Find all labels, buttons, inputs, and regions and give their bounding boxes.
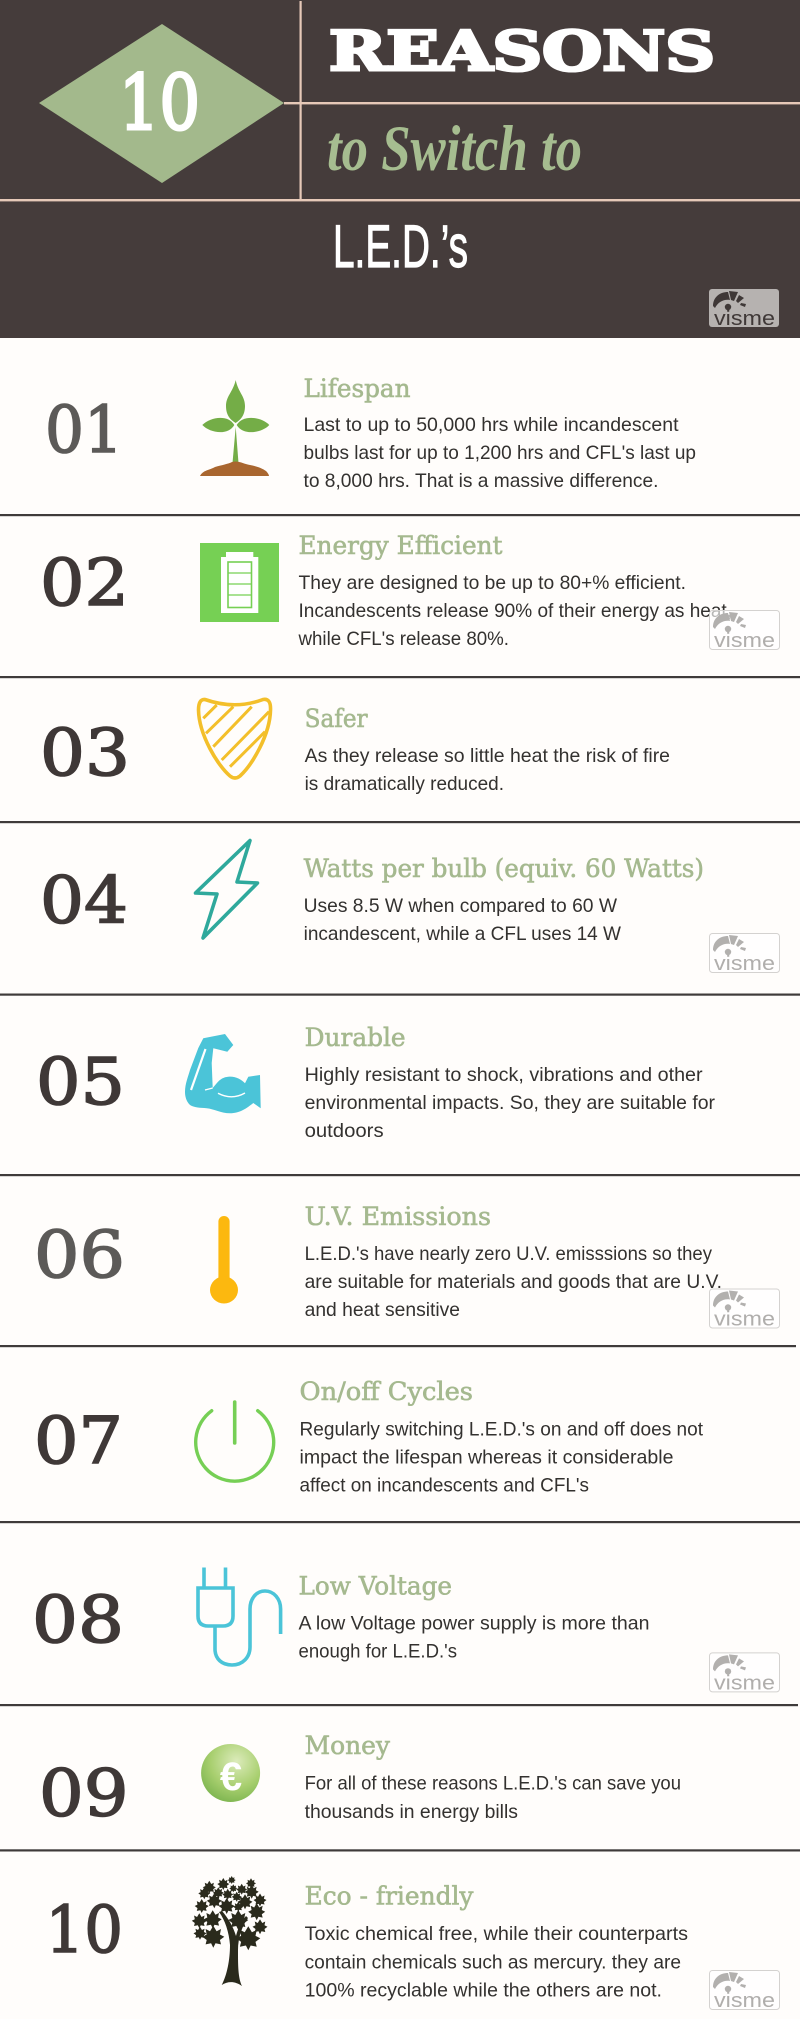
panel: 01 lifespan (45, 374, 696, 492)
body: low voltage: enough for L.E.D.'s (298, 1641, 457, 1663)
panel: 02 energy efficient (40, 531, 780, 652)
body: uv emissions (305, 1243, 722, 1321)
body: uv emissions: are suitable for materials and goods that are U.V. (305, 1271, 722, 1293)
body: on/off cycles (300, 1418, 704, 1497)
body: energy efficient: while CFL's release 80%. (298, 628, 509, 650)
body: durable: Highly resistant to shock, vibrations and other (305, 1064, 703, 1086)
panel: 09 money (39, 1731, 681, 1832)
header banner (0, 0, 800, 338)
body: lifespan: Last to up to 50,000 hrs while incandescent (304, 414, 679, 436)
watermark: row 6: visme (714, 1308, 775, 1330)
icon: euro coin (201, 1744, 260, 1802)
body: eco-friendly: 100% recyclable while the others are not. (305, 1979, 662, 2001)
icon: sprout (200, 380, 269, 476)
diamond badge with number 10: 10 (119, 58, 200, 147)
body: money: thousands in energy bills (305, 1801, 518, 1823)
panel: 03 safer (40, 699, 670, 795)
body: watts per bulb: Uses 8.5 W when compared to 60 W (304, 895, 618, 917)
body: energy efficient: They are designed to be up to 80+% efficient. (298, 572, 686, 594)
icon: battery (200, 543, 279, 622)
watermark: row 8: visme (714, 1672, 775, 1694)
body: uv emissions: L.E.D.'s have nearly zero U.V. emisssions so they (305, 1243, 712, 1265)
heading: Watts per bulb: Watts per bulb (equiv. 60 Watts) (304, 854, 704, 883)
number 07: 07 (34, 1404, 123, 1479)
body: lifespan: to 8,000 hrs. That is a massive difference. (304, 470, 658, 492)
body: lifespan (304, 414, 696, 492)
body: on/off cycles: impact the lifespan whereas it considerable (300, 1446, 674, 1468)
body: on/off cycles: Regularly switching L.E.D.'s on and off does not (300, 1418, 704, 1440)
watermark: header: visme (714, 308, 775, 330)
watermark: row 4: visme (714, 953, 775, 975)
body: energy efficient: Incandescents release 90% of their energy as heat, (298, 600, 732, 622)
body: eco-friendly (305, 1923, 688, 2001)
number 03: 03 (40, 716, 130, 791)
heading: Safer: Safer (305, 704, 368, 733)
body: durable: outdoors (305, 1120, 384, 1142)
watermark: row 6 (710, 1289, 780, 1330)
body: durable: environmental impacts. So, they are suitable for (305, 1092, 716, 1114)
icon: flexed arm (185, 1034, 261, 1113)
title: REASONS: REASONS (329, 19, 715, 83)
title: L.E.D.'s: L.E.D.’s (333, 213, 468, 280)
body: safer: is dramatically reduced. (305, 773, 504, 795)
body: on/off cycles: affect on incandescents and CFL's (300, 1475, 589, 1497)
icon: plug (198, 1568, 281, 1665)
icon: power button (196, 1402, 274, 1481)
panel: 08 low voltage (32, 1568, 780, 1694)
watermark: header (709, 289, 779, 330)
heading: U.V. Emissions: U.V. Emissions (305, 1202, 491, 1231)
heading: Eco - friendly: Eco - friendly (305, 1882, 474, 1911)
body: low voltage (298, 1612, 650, 1663)
icon: thermometer (210, 1216, 238, 1304)
watermark: row 4 (710, 934, 780, 975)
number 06: 06 (34, 1218, 125, 1293)
panel: 07 on/off cycles (34, 1377, 704, 1497)
heading: Durable: Durable (305, 1023, 406, 1052)
heading: Money: Money (305, 1731, 391, 1760)
heading: Low Voltage: Low Voltage (298, 1571, 452, 1600)
icon: tree (192, 1876, 268, 1986)
watermark: row 2 (710, 610, 780, 652)
panel: 06 uv emissions (34, 1202, 780, 1330)
number 10: 10 (46, 1893, 123, 1968)
heading: Lifespan: Lifespan (304, 374, 410, 403)
body: low voltage: A low Voltage power supply is more than (298, 1612, 650, 1634)
watermark: row 10 (710, 1970, 780, 2012)
title: to Switch to: to Switch to (327, 113, 582, 185)
body: eco-friendly: contain chemicals such as mercury. they are (305, 1951, 681, 1973)
panel: 10 eco-friendly (46, 1876, 780, 2012)
body: money: For all of these reasons L.E.D.'s can save you (305, 1773, 681, 1795)
panel: 05 durable (36, 1023, 716, 1142)
body: watts per bulb (304, 895, 622, 945)
icon: shield (198, 699, 271, 778)
watermark: row 2: visme (714, 630, 775, 652)
body: safer: As they release so little heat the risk of fire (305, 745, 670, 767)
panel: 04 watts per bulb (40, 840, 780, 975)
body: uv emissions: and heat sensitive (305, 1299, 460, 1321)
body: lifespan: bulbs last for up to 1,200 hrs and CFL's last up (304, 442, 696, 464)
icon: lightning bolt (196, 840, 258, 938)
number 02: 02 (40, 546, 129, 621)
icon: euro coin: € (220, 1755, 242, 1799)
body: durable (305, 1064, 716, 1142)
body: eco-friendly: Toxic chemical free, while their counterparts (305, 1923, 688, 1945)
heading: On/off Cycles: On/off Cycles (300, 1377, 473, 1406)
number 08: 08 (32, 1583, 124, 1658)
body: safer (305, 745, 670, 795)
watermark: row 10: visme (714, 1990, 775, 2012)
body: money (305, 1773, 681, 1823)
number 01: 01 (45, 393, 123, 468)
body: watts per bulb: incandescent, while a CFL uses 14 W (304, 923, 622, 945)
watermark: row 8 (710, 1653, 780, 1694)
number 05: 05 (36, 1045, 125, 1120)
number 04: 04 (40, 864, 128, 938)
number 09: 09 (39, 1757, 128, 1832)
heading: Energy Efficient: Energy Efficient (298, 531, 502, 560)
body: energy efficient (298, 572, 732, 650)
diamond badge with number 10 (39, 24, 284, 183)
